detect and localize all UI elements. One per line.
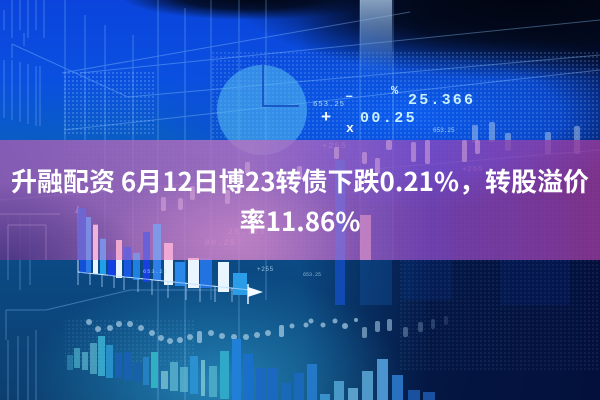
bar chart upper	[75, 205, 250, 295]
floating numbers: 25.366	[228, 228, 266, 237]
floating numbers: 653.25	[433, 127, 455, 134]
candlesticks upper	[472, 122, 580, 154]
floating numbers: 00.25	[360, 110, 417, 127]
floating numbers: +	[321, 109, 331, 128]
floating numbers: –	[345, 89, 353, 105]
title line 2: 率11.86%	[240, 202, 360, 239]
band overlay details	[0, 140, 480, 260]
floating numbers	[143, 84, 483, 278]
axis ticks and flag arrow	[78, 272, 263, 304]
blue columns right	[335, 140, 570, 305]
vertical light beam	[360, 0, 392, 80]
translucent purple band	[0, 140, 600, 260]
floating numbers: 00.25	[205, 239, 236, 248]
title line 1: 升融配资 6月12日博23转债下跌0.21%，转股溢价	[11, 162, 589, 199]
floating numbers: 25.366	[408, 92, 475, 109]
floating numbers: +255	[322, 141, 347, 151]
floating numbers: %	[391, 84, 399, 98]
floating numbers: 653.25	[313, 101, 345, 109]
dot matrix texture	[64, 50, 600, 370]
candlestick row lower	[86, 316, 448, 344]
bar chart lower	[67, 336, 435, 400]
pie chart circle	[217, 64, 307, 155]
floating numbers: +255	[462, 166, 483, 174]
floating numbers: 653.25	[303, 272, 321, 278]
floating numbers: 653.25	[143, 268, 168, 275]
floating numbers: x	[346, 121, 354, 136]
floating numbers: +255	[257, 266, 274, 273]
